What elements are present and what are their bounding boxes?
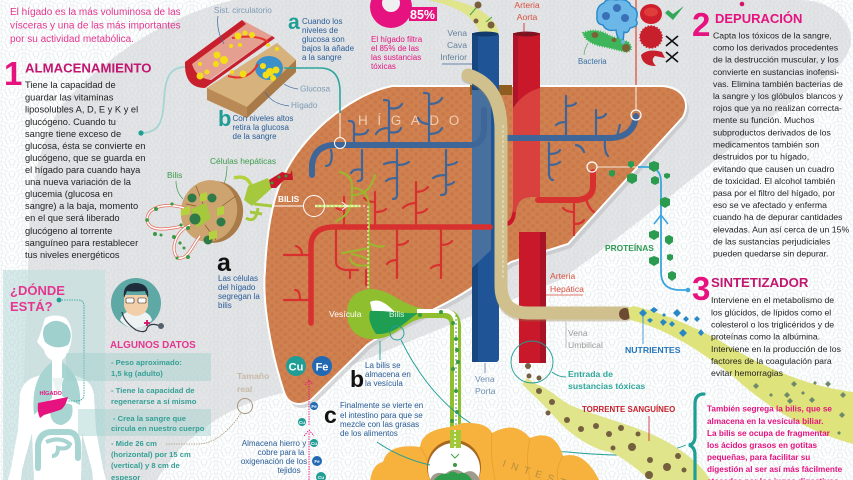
label: proteinas: PROTEÍNAS <box>605 242 654 253</box>
intestine <box>370 423 607 480</box>
panel: donde esta <box>3 270 106 480</box>
connector a to liver <box>284 68 346 148</box>
icon: immune cell and bacteria <box>578 0 637 66</box>
text block: depuracion: Capta los tóxicos de la sangre, <box>713 30 832 40</box>
mineral path <box>298 380 326 480</box>
label: almacena hierro: oxigenación de los <box>241 457 307 466</box>
text block: bilis: digestión al ser así más fácilmente <box>707 465 843 474</box>
heading: algunos datos: ALGUNOS DATOS <box>110 340 196 351</box>
icons: Cu Fe: Fe <box>316 362 328 374</box>
callout: entrada: sustancias tóxicas <box>568 381 645 391</box>
text block: sintetizador: evitar hemorragias <box>711 368 784 378</box>
text: datos: - Peso aproximado: <box>111 358 182 367</box>
callout: entrada: Entrada de <box>568 369 613 379</box>
panel: algunos datos <box>66 340 211 480</box>
label a: cells: a <box>217 249 232 277</box>
mineral path: Fe <box>314 459 320 464</box>
text block: sintetizador <box>711 295 842 378</box>
text block: depuracion: vas. Elimina también bacterias de <box>713 79 843 89</box>
label: la bilis se almacena <box>350 341 411 392</box>
label a: cells <box>217 249 260 310</box>
label: celulas hepaticas <box>210 156 276 190</box>
text block: almacenamiento: glucógeno, que se guarda en <box>25 153 145 163</box>
label: vena cava inferior <box>440 28 472 64</box>
label a: glucose low: a la sangre <box>302 53 342 62</box>
label b: glucose high: de la sangre <box>232 132 277 141</box>
label: higado block: Hígado <box>291 101 318 110</box>
label: la bilis se almacena: La bilis se <box>365 361 401 370</box>
callout circle on gallbladder <box>390 326 686 455</box>
label: almacena hierro: cobre para la <box>258 448 305 457</box>
label: vena umbilical <box>566 322 603 350</box>
bands <box>66 353 211 436</box>
text: datos: - Crea la sangre que <box>113 414 186 423</box>
intro text: El hígado es la más voluminosa de las <box>10 7 181 18</box>
green bile tree <box>315 172 384 290</box>
label: bilis in gallbladder: Bilis <box>389 309 404 319</box>
text block: bilis <box>707 404 843 480</box>
label: arteria hepatica: Hepática <box>550 284 584 294</box>
text block: almacenamiento: en el que será liberado <box>25 213 120 223</box>
text block: almacenamiento <box>25 80 145 260</box>
intro text: vísceras y una de las más importantes <box>10 20 181 32</box>
label: la bilis se almacena: almacena en <box>365 370 411 379</box>
label: higado on body: HÍGADO <box>40 389 63 397</box>
text block: depuracion: eso se ve afectado y enferma <box>713 200 827 210</box>
text: datos: - Tiene la capacidad de <box>111 386 195 395</box>
text: datos <box>111 358 205 480</box>
text: datos: circula en nuestro cuerpo <box>111 424 205 433</box>
label: arteria hepatica <box>546 271 584 295</box>
label a: glucose low: a <box>288 11 300 34</box>
dotted leader <box>57 298 84 401</box>
percentage donut: 85% <box>410 8 435 22</box>
blue vein branches <box>312 93 636 199</box>
brace <box>689 394 704 480</box>
label a: cells: del hígado <box>218 283 256 292</box>
vena cava <box>472 32 499 362</box>
label b: glucose high: b <box>218 106 231 131</box>
label: la bilis se almacena: la vesícula <box>365 379 403 388</box>
aorta <box>506 32 546 363</box>
red artery branches <box>284 172 594 323</box>
label: vena porta <box>475 363 496 396</box>
label: bilis green <box>167 170 183 199</box>
text block: sintetizador: los glúcidos, de lípidos como el <box>711 308 831 318</box>
dot: depuracion <box>740 2 744 6</box>
text block: almacenamiento: glucosa, ésta se convierte en <box>25 141 145 151</box>
text block: depuracion <box>713 30 849 258</box>
text: datos: (vertical) y 8 cm de <box>111 461 180 470</box>
icons: Cu Fe: Cu <box>289 362 303 374</box>
icons: Cu Fe <box>286 356 332 376</box>
text block: depuracion: como los derivados procedentes <box>713 43 839 53</box>
label a: glucose low: niveles de <box>302 26 339 35</box>
mineral path: Cu <box>318 475 324 480</box>
label: finalmente: el intestino para que se <box>340 411 423 420</box>
hepatic artery trunk <box>519 232 546 363</box>
text block: depuracion: de toxicidad. El alcohol también <box>713 176 835 186</box>
text block: almacenamiento: sangre) a la baja, momento <box>25 201 138 211</box>
label: arteria aorta: Arteria <box>514 0 540 10</box>
label: bacteria: Bacteria <box>578 57 607 66</box>
text: datos: - Mide 26 cm <box>111 439 157 448</box>
text block: depuracion: convierte en sustancias inofensi- <box>713 67 839 77</box>
label: vena cava inferior: Cava <box>447 40 467 50</box>
label: vena umbilical: Vena <box>568 328 588 338</box>
text block: almacenamiento: Tiene la capacidad de <box>25 80 116 90</box>
mineral path: Cu <box>311 441 317 446</box>
label: vena cava inferior: Vena <box>447 28 467 38</box>
label: la bilis se almacena: b <box>350 366 364 392</box>
text block: depuracion: de la destrucción muscular, y los <box>713 55 839 65</box>
toxic bloodstream <box>522 363 710 480</box>
label: sist. circulatorio <box>214 6 272 44</box>
text block: depuracion: la sangre y los glóbulos blancos y <box>713 91 844 101</box>
label: vena porta: Vena <box>475 374 495 384</box>
heading: almacenamiento: ALMACENAMIENTO <box>25 60 152 76</box>
gallbladder <box>329 289 461 445</box>
label: vena cava inferior: Inferior <box>440 52 467 62</box>
label: finalmente: mezcle con las grasas <box>340 420 419 429</box>
label: almacena hierro: Almacena hierro y <box>242 439 306 448</box>
liver <box>264 85 689 408</box>
text: 85 percent: El hígado filtra <box>371 35 423 44</box>
icon: liver cell cylinder <box>145 156 293 260</box>
label b: glucose high: Con niveles altos <box>232 114 293 123</box>
label: bilis green: Bilis <box>167 170 182 180</box>
callout: entrada <box>511 341 645 391</box>
size callout <box>166 371 269 444</box>
panel: sintetizador <box>692 270 842 378</box>
text block: almacenamiento: sangre tiene exceso de <box>25 129 121 139</box>
panel: bilis note <box>689 394 843 480</box>
percentage donut <box>370 0 437 71</box>
text: 85 percent: tóxicas <box>371 62 396 71</box>
text block: depuracion: mente su función. Muchos <box>713 115 815 125</box>
label: vena porta: Porta <box>475 386 496 396</box>
label: glucosa: Glucosa <box>300 84 330 94</box>
text block: bilis: También segrega la bilis, que se <box>707 404 832 414</box>
label a: glucose low <box>288 11 355 62</box>
icon: glucose block and vessel <box>185 20 296 118</box>
label a: cells: Las células <box>218 274 258 283</box>
label: arteria aorta <box>514 0 540 33</box>
text: datos: (horizontal) por 15 cm <box>111 450 191 459</box>
connector: protein line <box>587 161 690 292</box>
text: datos: regenerarse a sí mismo <box>111 397 197 406</box>
mineral path: Fe <box>311 404 317 409</box>
panel: almacenamiento <box>4 55 152 260</box>
text: 85 percent: las sustancias <box>371 53 421 62</box>
text block: sintetizador: colesterol o los triglicéridos y de <box>711 320 834 330</box>
text block: depuracion: subproductos derivados de los <box>713 128 831 138</box>
text block: almacenamiento: tus niveles energéticos <box>25 250 120 260</box>
bilis callout <box>267 194 324 216</box>
connector: almacenamiento to glucose <box>138 67 185 136</box>
label: finalmente: Finalmente se vierte en <box>340 401 423 410</box>
label: torrente sanguineo: TORRENTE SANGUÍNEO <box>582 405 675 414</box>
text block: depuracion: rojos que ya no realizan correcta- <box>713 103 842 113</box>
text: 85 percent: el 85% de las <box>371 44 419 53</box>
label b: glucose high: retira la glucosa <box>232 123 290 132</box>
text block: sintetizador: Interviene en el metabolismo de <box>711 295 834 305</box>
panel: depuracion <box>692 6 849 258</box>
label: vesicula: Vesícula <box>329 309 362 319</box>
text block: bilis: almacena en la vesícula biliar. <box>707 417 824 426</box>
label: almacena hierro <box>241 439 307 475</box>
label: vena umbilical: Umbilical <box>568 340 603 350</box>
label: finalmente <box>324 401 423 438</box>
label: sist. circulatorio: Sist. circulatorio <box>214 6 272 15</box>
line to intestine <box>377 442 430 465</box>
text block: sintetizador: factores de la coagulación para <box>711 356 832 366</box>
text block: almacenamiento: una nueva variación de la <box>25 177 132 187</box>
label: arteria hepatica: Arteria <box>550 271 576 281</box>
label: celulas hepaticas: Células hepáticas <box>210 156 276 166</box>
text block: depuracion: cuando ha de depurar cantidades <box>713 212 843 222</box>
text block: depuracion: destruidos por tu hígado, <box>713 152 809 162</box>
number 1: 1 <box>4 55 22 92</box>
text block: bilis: los ácidos grasos en gotitas <box>707 441 818 450</box>
label a: cells: bilis <box>218 301 232 310</box>
text block: almacenamiento: glucógeno. Cuando tu <box>25 117 116 127</box>
label: nutrientes <box>625 316 681 355</box>
text block: bilis: La bilis se ocupa de fragmentar <box>707 429 831 438</box>
nutrient stream <box>628 306 853 444</box>
text block: depuracion: medicamentos también son <box>713 140 819 150</box>
label: finalmente: c <box>324 402 337 428</box>
text block: almacenamiento: liposolubles A, D, E y K y el <box>25 104 138 114</box>
text: datos: 1,5 kg (adulto) <box>111 369 163 378</box>
body silhouette <box>8 316 106 480</box>
text block: depuracion: pueden quedarse sin depurar. <box>713 248 828 258</box>
text block: depuracion: evitando que causen un cuadro <box>713 164 834 174</box>
toxic stream top <box>428 0 499 33</box>
label: glucosa <box>284 84 330 94</box>
label: arteria aorta: Aorta <box>517 12 537 22</box>
connector: depuration line <box>631 0 641 120</box>
label a: glucose low: bajos la añade <box>302 44 355 53</box>
text: 85 percent <box>371 35 423 71</box>
heading: donde esta: ¿DÓNDE <box>10 283 65 298</box>
text block: depuracion: de las sustancias perjudiciales <box>713 236 831 246</box>
label: finalmente: de los alimentos <box>340 429 398 438</box>
label b: glucose high <box>218 106 293 141</box>
umbilical vein <box>468 75 631 320</box>
number 2: 2 <box>692 6 710 43</box>
text block: almacenamiento: el hígado para cuando haya <box>25 165 141 175</box>
heading: depuracion: DEPURACIÓN <box>715 11 802 26</box>
intro text: por su actividad metabólica. <box>10 34 134 45</box>
icon: doctor <box>111 278 164 332</box>
panel: donde esta: ESTÁ? <box>10 299 53 314</box>
bilis callout: BILIS <box>278 194 300 204</box>
text: higado: HÍGADO <box>358 113 469 128</box>
label a: glucose low: Cuando los <box>302 17 342 26</box>
text block: almacenamiento: glucógeno al torrente <box>25 226 112 236</box>
label a: cells: segregan la <box>218 292 260 301</box>
text block: sintetizador: Interviene en la producción de los <box>711 344 842 354</box>
number 3: 3 <box>692 270 710 307</box>
text block: sintetizador: proteínas como la albúmina. <box>711 332 820 342</box>
label: torrente sanguineo <box>582 405 675 441</box>
label: nutrientes: NUTRIENTES <box>625 345 681 355</box>
icon: blood cells <box>640 4 684 66</box>
text block: depuracion: pasa por el filtro del hígado, por <box>713 188 835 198</box>
text block: bilis: pequeñas, para facilitar su <box>707 453 810 462</box>
label a: glucose low: glucosa son <box>302 35 345 44</box>
text block: depuracion: elevadas. Aun así cerca de un 15% <box>713 224 849 234</box>
size callout: real <box>237 384 252 394</box>
text block: almacenamiento: glucemia (glucosa en <box>25 189 113 199</box>
intro text <box>10 7 181 45</box>
heading: sintetizador: SINTETIZADOR <box>711 275 809 290</box>
label: almacena hierro: tejidos <box>277 466 301 475</box>
text block: almacenamiento: sanguíneo para restablecer <box>25 238 138 248</box>
text block: almacenamiento: guardar las vitaminas <box>25 92 114 102</box>
mineral path: Cu <box>299 420 305 425</box>
size callout: Tamaño <box>237 371 269 381</box>
label: higado block <box>265 92 318 110</box>
